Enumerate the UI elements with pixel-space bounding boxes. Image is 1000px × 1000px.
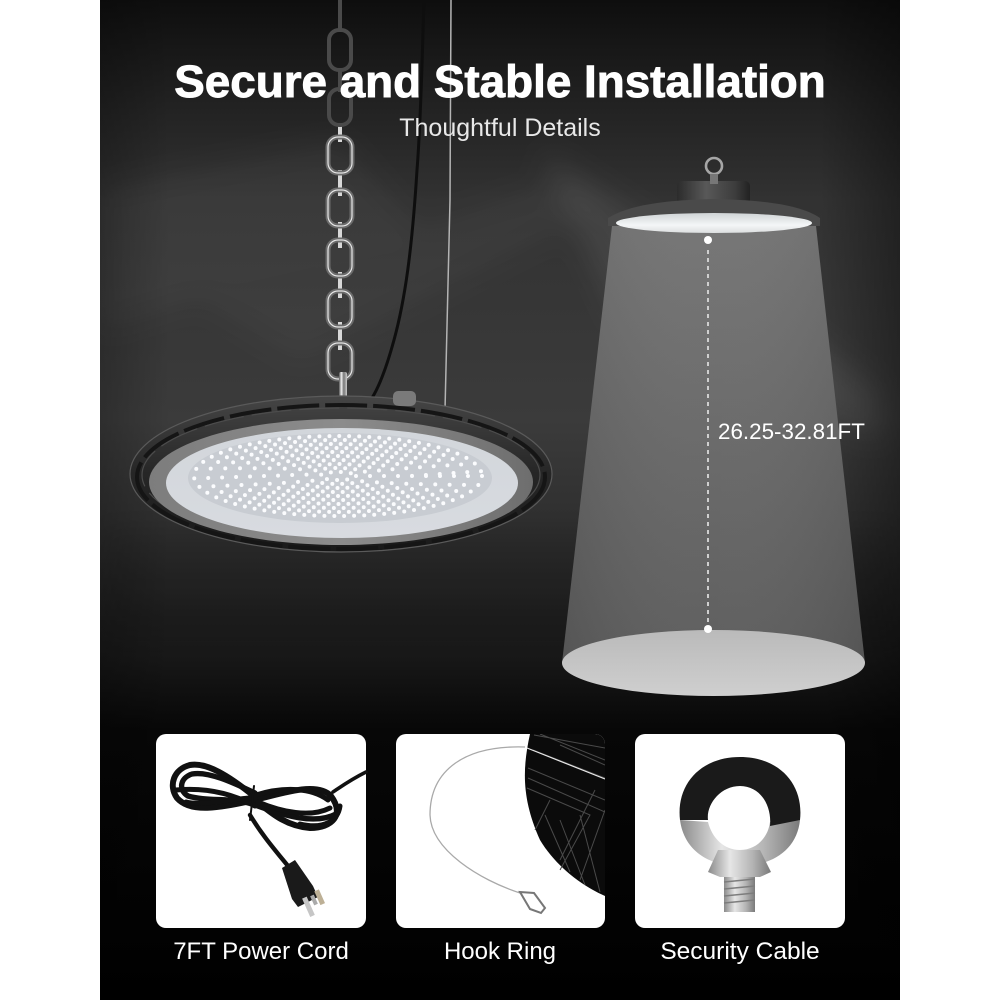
right lamp with light cone <box>562 158 865 696</box>
black power cable <box>372 0 424 398</box>
panel: power cord <box>156 734 366 928</box>
nut <box>708 850 771 877</box>
panel: security cable <box>635 734 845 928</box>
silver bezel <box>149 419 533 545</box>
eye hook <box>339 372 347 398</box>
card background <box>396 734 605 928</box>
dark background panel <box>100 0 900 1000</box>
safety wire <box>430 747 525 893</box>
LED array <box>194 436 482 516</box>
floor light pool <box>562 630 865 696</box>
left high bay lamp with chain <box>130 0 552 552</box>
hanging chain <box>328 0 352 379</box>
ring stem <box>710 174 718 184</box>
rim fin notches <box>137 405 545 549</box>
junction box <box>393 391 416 406</box>
white diffuser <box>166 428 518 538</box>
black lamp back with ribs <box>525 734 605 896</box>
subtitle: Thoughtful Details <box>399 114 601 142</box>
silver lower ring <box>680 820 800 866</box>
card background <box>156 734 366 928</box>
security wire <box>445 0 451 410</box>
diffuser inner ring <box>188 433 492 523</box>
light cone <box>562 226 865 663</box>
height label: 26.25-32.81FT <box>718 419 865 444</box>
carabiner <box>520 892 545 913</box>
threaded shaft <box>724 875 755 912</box>
glowing lens <box>616 213 812 233</box>
lamp housing <box>608 199 820 226</box>
height marker top dot <box>704 236 712 244</box>
icon: plug <box>282 860 325 917</box>
label: hook ring: Hook Ring <box>444 938 556 965</box>
card background <box>635 734 845 928</box>
height marker bottom dot <box>704 625 712 633</box>
eye ring <box>706 158 722 174</box>
icon: eye bolt <box>680 757 800 912</box>
lamp body top <box>296 396 388 404</box>
label: power cord: 7FT Power Cord <box>173 938 349 965</box>
icon: coiled black cord <box>173 765 366 866</box>
black rubber coating <box>680 757 800 826</box>
lamp cap <box>677 181 750 205</box>
outer housing rim <box>130 396 552 552</box>
panel: hook ring <box>396 734 605 928</box>
height marker dashed line <box>707 250 709 622</box>
label: security cable: Security Cable <box>660 938 820 965</box>
title: Secure and Stable Installation <box>174 56 826 107</box>
